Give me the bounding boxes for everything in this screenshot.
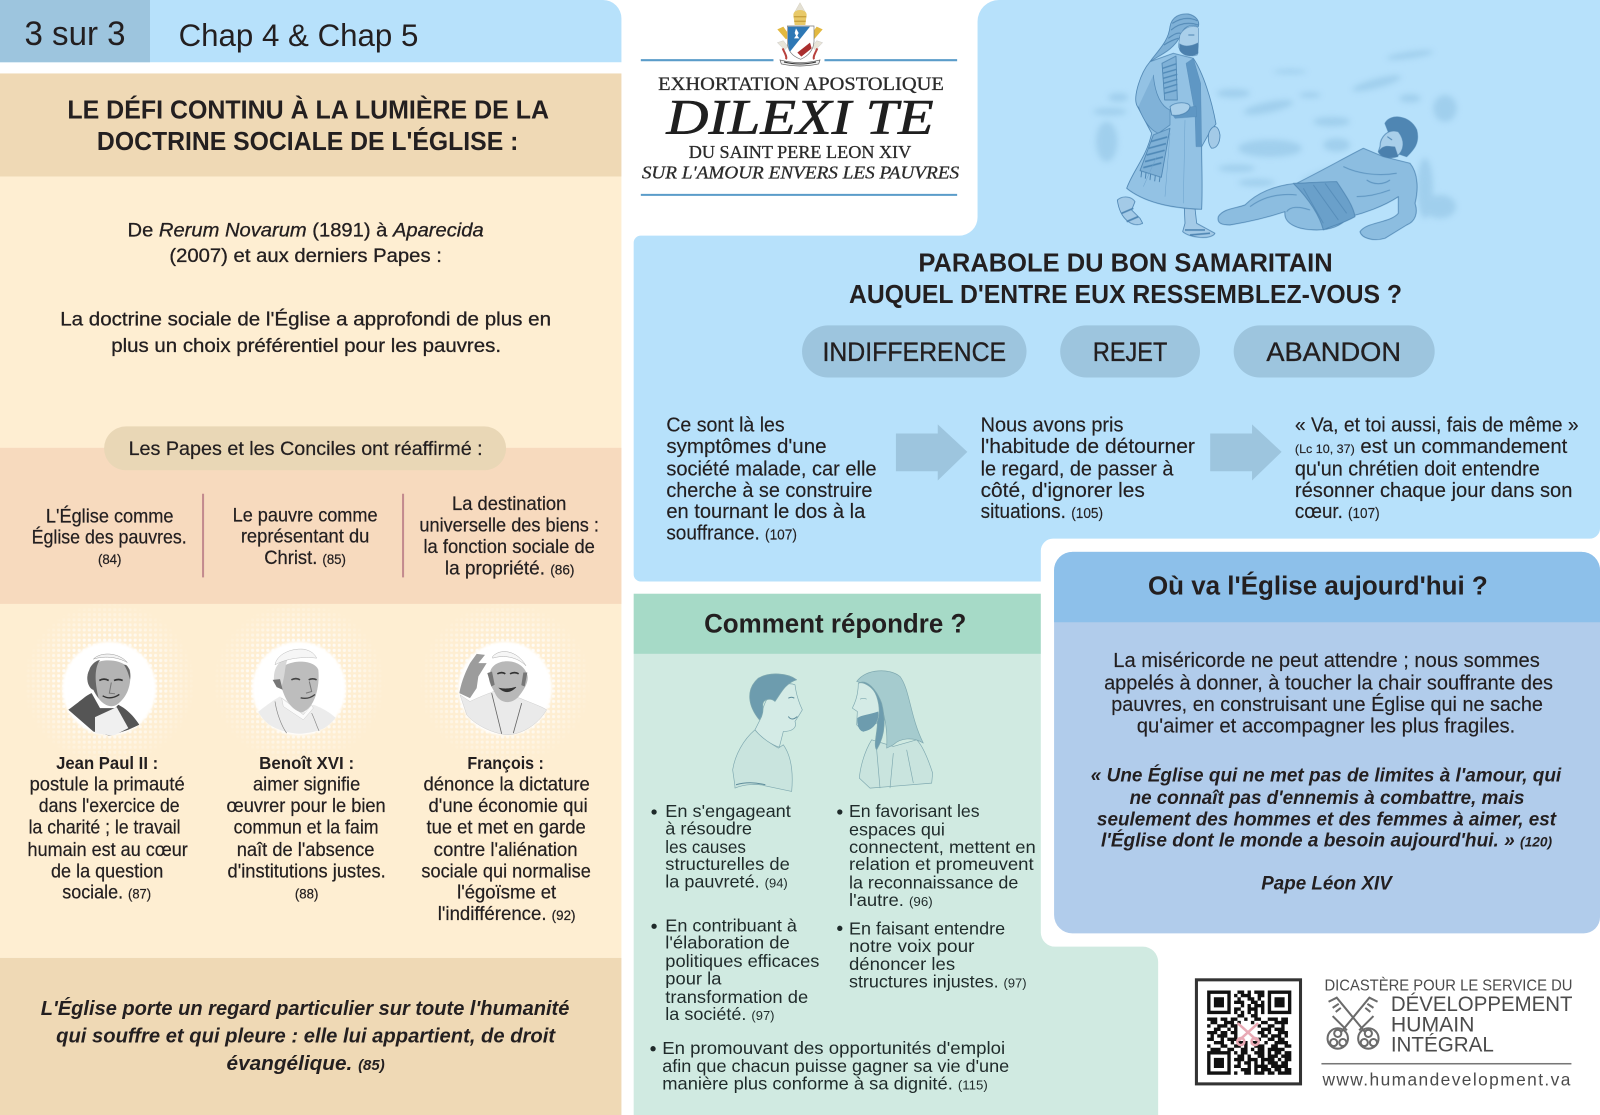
dicastery name: DÉVELOPPEMENT	[1391, 991, 1572, 1016]
text: mercy	[1104, 650, 1553, 737]
pill: rejet	[1060, 325, 1200, 377]
column: universal destination of goods: la fonction sociale de	[423, 536, 595, 558]
text: Jean Paul II: la charité ; le travail	[29, 816, 181, 838]
list item: employment: manière plus conforme à sa dignité. (115)	[662, 1073, 988, 1093]
text: symptoms: Ce sont là les	[666, 415, 785, 437]
closing quote band	[0, 958, 621, 1115]
list item: voice: En faisant entendre	[849, 918, 1005, 938]
exhortation label: EXHORTATION APOSTOLIQUE	[658, 74, 944, 95]
dicastery name	[1391, 991, 1572, 1057]
list item: causes: En s'engageant	[665, 801, 791, 821]
list item: causes	[651, 801, 791, 892]
figure: man	[733, 674, 802, 791]
heading: comment répondre	[634, 594, 1041, 654]
column: universal destination of goods: universelle des biens :	[419, 514, 599, 536]
text: Benoît XVI: aimer signifie	[253, 774, 360, 796]
text: habit: Nous avons pris	[981, 415, 1124, 437]
panel: comment répondre	[634, 594, 1158, 1115]
QR code	[1196, 980, 1301, 1084]
dicastery name: INTÉGRAL	[1391, 1032, 1494, 1057]
panel: social doctrine	[0, 73, 621, 1115]
list item: causes: les causes	[665, 837, 746, 857]
band: popes and councils	[0, 426, 621, 604]
text: mercy: pauvres, en construisant une Église qui ne sache	[1111, 693, 1543, 716]
text: mercy: appelés à donner, à toucher la chair souffrante des	[1104, 673, 1553, 695]
heading: parabole	[849, 249, 1402, 309]
text: Jean Paul II	[28, 753, 188, 904]
text: François: François :	[467, 753, 544, 773]
text: Jean Paul II: humain est au cœur	[28, 839, 188, 861]
heading: le défi continu: LE DÉFI CONTINU À LA LUMIÈRE DE LA	[67, 95, 549, 124]
list item: spaces: relation et promeuvent	[849, 854, 1034, 874]
text: habit: le regard, de passer à	[981, 458, 1174, 480]
text: Benoît XVI: naît de l'absence	[237, 839, 374, 861]
portrait: François	[459, 652, 547, 735]
text: commandment: résonner chaque jour dans son	[1295, 480, 1572, 502]
pill: abandon: ABANDON	[1266, 337, 1401, 367]
quote	[1091, 763, 1562, 852]
text: habit: situations. (105)	[981, 501, 1103, 523]
text: Benoît XVI: d'institutions justes.	[228, 860, 386, 882]
chapter label: Chap 4 & Chap 5	[179, 17, 418, 53]
heading: où va l'église	[1054, 552, 1600, 622]
text: mercy: qu'aimer et accompagner les plus fragiles.	[1137, 715, 1515, 737]
list item: policies: politiques efficaces	[665, 951, 819, 971]
list item: causes: à résoudre	[665, 818, 752, 838]
closing quote band: qui souffre et qui pleure : elle lui appartient, de droit	[56, 1026, 556, 1048]
website: www.humandevelopment.va	[1321, 1069, 1571, 1089]
pill: indifference: INDIFFERENCE	[822, 337, 1006, 367]
figure: wounded man	[1218, 117, 1418, 240]
text: habit: l'habitude de détourner	[981, 436, 1195, 458]
list item: policies: l'élaboration de	[665, 933, 790, 953]
heading: comment répondre: Comment répondre ?	[704, 608, 966, 638]
text: commandment: cœur. (107)	[1295, 501, 1380, 523]
heading: parabole: PARABOLE DU BON SAMARITAIN	[918, 249, 1333, 277]
list item: voice: structures injustes. (97)	[849, 971, 1027, 991]
panel: good samaritan	[634, 0, 1600, 581]
heading: parabole: AUQUEL D'ENTRE EUX RESSEMBLEZ-VOUS ?	[849, 281, 1402, 309]
text: Jean Paul II: postule la primauté	[30, 774, 185, 796]
quote: l'Église dont le monde a besoin aujourd'hui. » (120)	[1101, 829, 1552, 852]
list item: policies: la société. (97)	[665, 1004, 774, 1024]
figure: Jesus	[852, 671, 933, 788]
title block: Dilexi Te	[641, 3, 959, 195]
list item: spaces: l'autre. (96)	[849, 890, 933, 910]
column: church of the poor: (84)	[98, 552, 121, 568]
list item: spaces: En favorisant les	[849, 801, 980, 821]
text: symptoms: en tournant le dos à la	[666, 501, 866, 523]
logo: dicastery	[1321, 976, 1572, 1089]
column: universal destination of goods: la propriété. (86)	[445, 557, 574, 579]
list item: policies: transformation de	[665, 987, 808, 1007]
pill label: Les Papes et les Conciles ont réaffirmé :	[129, 438, 483, 460]
text: commandment: « Va, et toi aussi, fais de même »	[1295, 415, 1579, 437]
text: symptoms	[666, 415, 877, 545]
text: commandment	[1295, 415, 1579, 523]
dicastery title: DICASTÈRE POUR LE SERVICE DU	[1324, 976, 1572, 995]
text: Jean Paul II: Jean Paul II :	[56, 753, 158, 773]
list item: employment: afin que chacun puisse gagner sa vie d'une	[662, 1056, 1009, 1076]
icon: pink keys	[1237, 1023, 1259, 1045]
text: Benoît XVI: Benoît XVI :	[259, 753, 354, 773]
list item: policies: pour la	[665, 968, 722, 988]
text: symptoms: symptômes d'une	[666, 436, 827, 458]
subtitle: SUR L'AMOUR ENVERS LES PAUVRES	[642, 163, 959, 183]
text block: from Rerum Novarum	[128, 220, 484, 267]
signature: Pape Léon XIV	[1261, 873, 1394, 895]
list item: causes: structurelles de	[665, 854, 790, 874]
list item: employment	[650, 1038, 1009, 1093]
column: church of the poor	[32, 504, 187, 568]
pill: abandon	[1234, 325, 1435, 377]
text: symptoms: cherche à se construire	[666, 480, 872, 502]
column: the poor represent Christ: représentant du	[241, 526, 369, 548]
pill: indifference	[802, 325, 1027, 377]
list item: spaces: espaces qui	[849, 819, 945, 839]
text: Jean Paul II: sociale. (87)	[62, 882, 151, 904]
column: church of the poor: L'Église comme	[46, 504, 173, 527]
pill label	[104, 426, 506, 470]
text block: from Rerum Novarum: (2007) et aux derniers Papes :	[169, 245, 442, 267]
text: commandment: (Lc 10, 37) est un commandement	[1295, 436, 1568, 458]
icon: papal coat of arms	[777, 3, 823, 66]
pill: rejet: REJET	[1093, 337, 1167, 367]
heading: le défi continu: DOCTRINE SOCIALE DE L'ÉGLISE :	[97, 127, 518, 156]
dicastery name: HUMAIN	[1391, 1012, 1474, 1036]
column: the poor represent Christ: Christ. (85)	[264, 547, 346, 569]
heading: le défi continu	[0, 73, 621, 176]
text block: preferential choice: plus un choix préférentiel pour les pauvres.	[111, 335, 501, 357]
quote: seulement des hommes et des femmes à aimer, est	[1097, 808, 1558, 830]
text: mercy: La miséricorde ne peut attendre ; nous sommes	[1113, 650, 1540, 672]
list item: spaces: connectent, mettent en	[849, 837, 1036, 857]
list item: voice: notre voix pour	[849, 936, 975, 956]
text: Benoît XVI: (88)	[295, 887, 318, 903]
page counter: 3 sur 3	[24, 15, 126, 53]
text: François: dénonce la dictature	[423, 774, 590, 796]
document title: DILEXI TE	[665, 89, 934, 145]
figure: samaritan	[1117, 14, 1220, 238]
text: Jean Paul II: dans l'exercice de	[39, 795, 180, 817]
list item: policies: En contribuant à	[665, 915, 797, 935]
illustration: man and Jesus	[733, 671, 933, 791]
list item: voice: dénoncer les	[849, 954, 955, 974]
column: the poor represent Christ	[233, 504, 378, 569]
illustration: samaritan and wounded man	[1093, 14, 1457, 240]
text: François: sociale qui normalise	[421, 860, 591, 882]
text: Benoît XVI	[227, 753, 386, 903]
column: church of the poor: Église des pauvres.	[32, 526, 187, 549]
text: François: l'indifférence. (92)	[438, 903, 576, 925]
pope: François	[418, 602, 592, 925]
text: François: d'une économie qui	[429, 795, 588, 817]
text: habit: côté, d'ignorer les	[981, 480, 1145, 502]
list item: causes: la pauvreté. (94)	[665, 872, 788, 892]
column: universal destination of goods	[419, 493, 599, 579]
arrow 1	[896, 424, 967, 480]
text block: preferential choice: La doctrine sociale de l'Église a approfondi de plus en	[60, 307, 551, 330]
author: DU SAINT PERE LEON XIV	[689, 142, 911, 162]
panel: chapter header	[0, 0, 621, 62]
list item: spaces: la reconnaissance de	[849, 873, 1018, 893]
closing quote band: évangélique. (85)	[227, 1053, 385, 1075]
icon: crossed keys	[1328, 998, 1379, 1049]
text block: preferential choice	[60, 307, 551, 357]
text: symptoms: souffrance. (107)	[666, 523, 797, 545]
list item: voice	[837, 918, 1027, 991]
text: Benoît XVI: œuvrer pour le bien	[227, 795, 386, 817]
portrait: Benoît XVI	[257, 649, 337, 734]
text: Jean Paul II: de la question	[51, 860, 163, 882]
text: François: contre l'aliénation	[434, 839, 578, 861]
pope: Benoît XVI	[212, 602, 386, 903]
list item: spaces	[837, 801, 1036, 910]
quote: ne connaît pas d'ennemis à combattre, mais	[1130, 787, 1525, 809]
list item: employment: En promouvant des opportunités d'emploi	[662, 1038, 1005, 1058]
text: habit	[981, 415, 1195, 523]
arrow 2	[1210, 424, 1282, 480]
list item: policies	[651, 915, 819, 1024]
text: François	[421, 753, 591, 925]
text: commandment: qu'un chrétien doit entendre	[1295, 458, 1540, 480]
column: the poor represent Christ: Le pauvre comme	[233, 504, 378, 526]
text: symptoms: société malade, car elle	[666, 458, 877, 480]
closing quote band: L'Église porte un regard particulier sur toute l'humanité	[41, 997, 569, 1020]
text: François: l'égoïsme et	[457, 882, 557, 904]
heading: où va l'église: Où va l'Église aujourd'hui ?	[1148, 572, 1488, 601]
quote: « Une Église qui ne met pas de limites à l'amour, qui	[1091, 763, 1562, 786]
text block: from Rerum Novarum: De Rerum Novarum (1891) à Aparecida	[128, 220, 484, 242]
portrait: Jean Paul II	[68, 654, 139, 736]
text: Benoît XVI: commun et la faim	[234, 816, 379, 838]
column: universal destination of goods: La destination	[452, 493, 566, 515]
panel: où va l'église	[1054, 552, 1600, 933]
text: François: tue et met en garde	[427, 816, 586, 838]
pope: Jean Paul II	[28, 610, 188, 902]
